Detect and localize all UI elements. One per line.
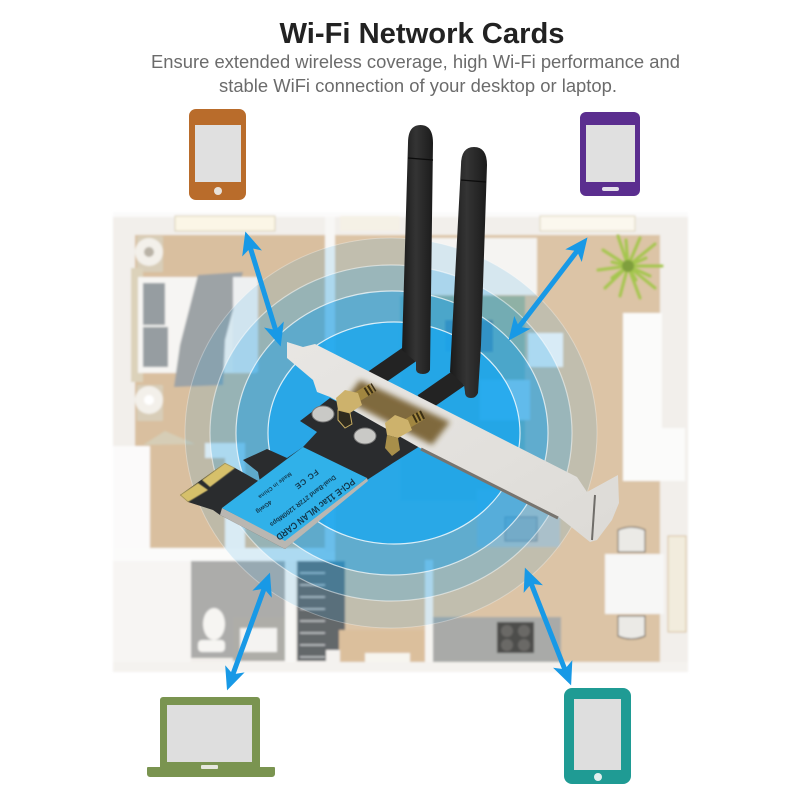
screws: [312, 406, 376, 444]
title: Wi-Fi Network Cards: [280, 18, 564, 50]
bracket corner fold: [592, 495, 595, 540]
arrow: top right: [512, 242, 584, 336]
gold connector: right: [385, 414, 424, 456]
gold contacts: [180, 463, 235, 502]
subtitle text: stable WiFi connection of your desktop or laptop.: [219, 76, 617, 96]
connector reflection on bracket: [345, 380, 450, 445]
label side edge: [220, 478, 368, 549]
subtitle text: Ensure extended wireless coverage, high Wi-Fi performance and: [151, 52, 680, 72]
antenna: left: [402, 125, 433, 374]
antenna: right: [450, 147, 487, 398]
floor plan: [113, 212, 688, 672]
metal bracket: [287, 342, 619, 542]
icon: orange phone: [189, 109, 246, 200]
arrow: top left: [247, 237, 279, 341]
circuit board: [180, 398, 420, 549]
antenna base: left: [374, 354, 410, 379]
icon: teal tablet: [564, 688, 631, 784]
dining table: [605, 527, 686, 639]
arrow: bottom right: [527, 573, 569, 680]
label text: 4Gwig: [254, 498, 272, 514]
icon: purple phone: [580, 112, 640, 196]
label text: PCI-E 11ac WLAN CARD: [273, 476, 357, 542]
lower rooms: [113, 560, 688, 672]
plant: [598, 236, 662, 298]
bracket lower edge: [421, 449, 558, 518]
bedroom furniture: [131, 236, 258, 445]
icon: green laptop: [147, 697, 275, 777]
wifi signal rings: [185, 238, 597, 628]
antenna base: right: [423, 378, 459, 403]
blue label: [222, 447, 367, 542]
subtitle text: [151, 52, 680, 96]
label text: Made in China: [256, 470, 292, 500]
arrow: bottom left: [229, 578, 268, 685]
living room furniture: [400, 238, 685, 547]
label text: Dual-Band 2T2R 1200Mbps: [268, 473, 337, 528]
gold connector: left: [336, 387, 374, 428]
network card: [180, 342, 619, 549]
label text: FC CE: [293, 467, 320, 491]
